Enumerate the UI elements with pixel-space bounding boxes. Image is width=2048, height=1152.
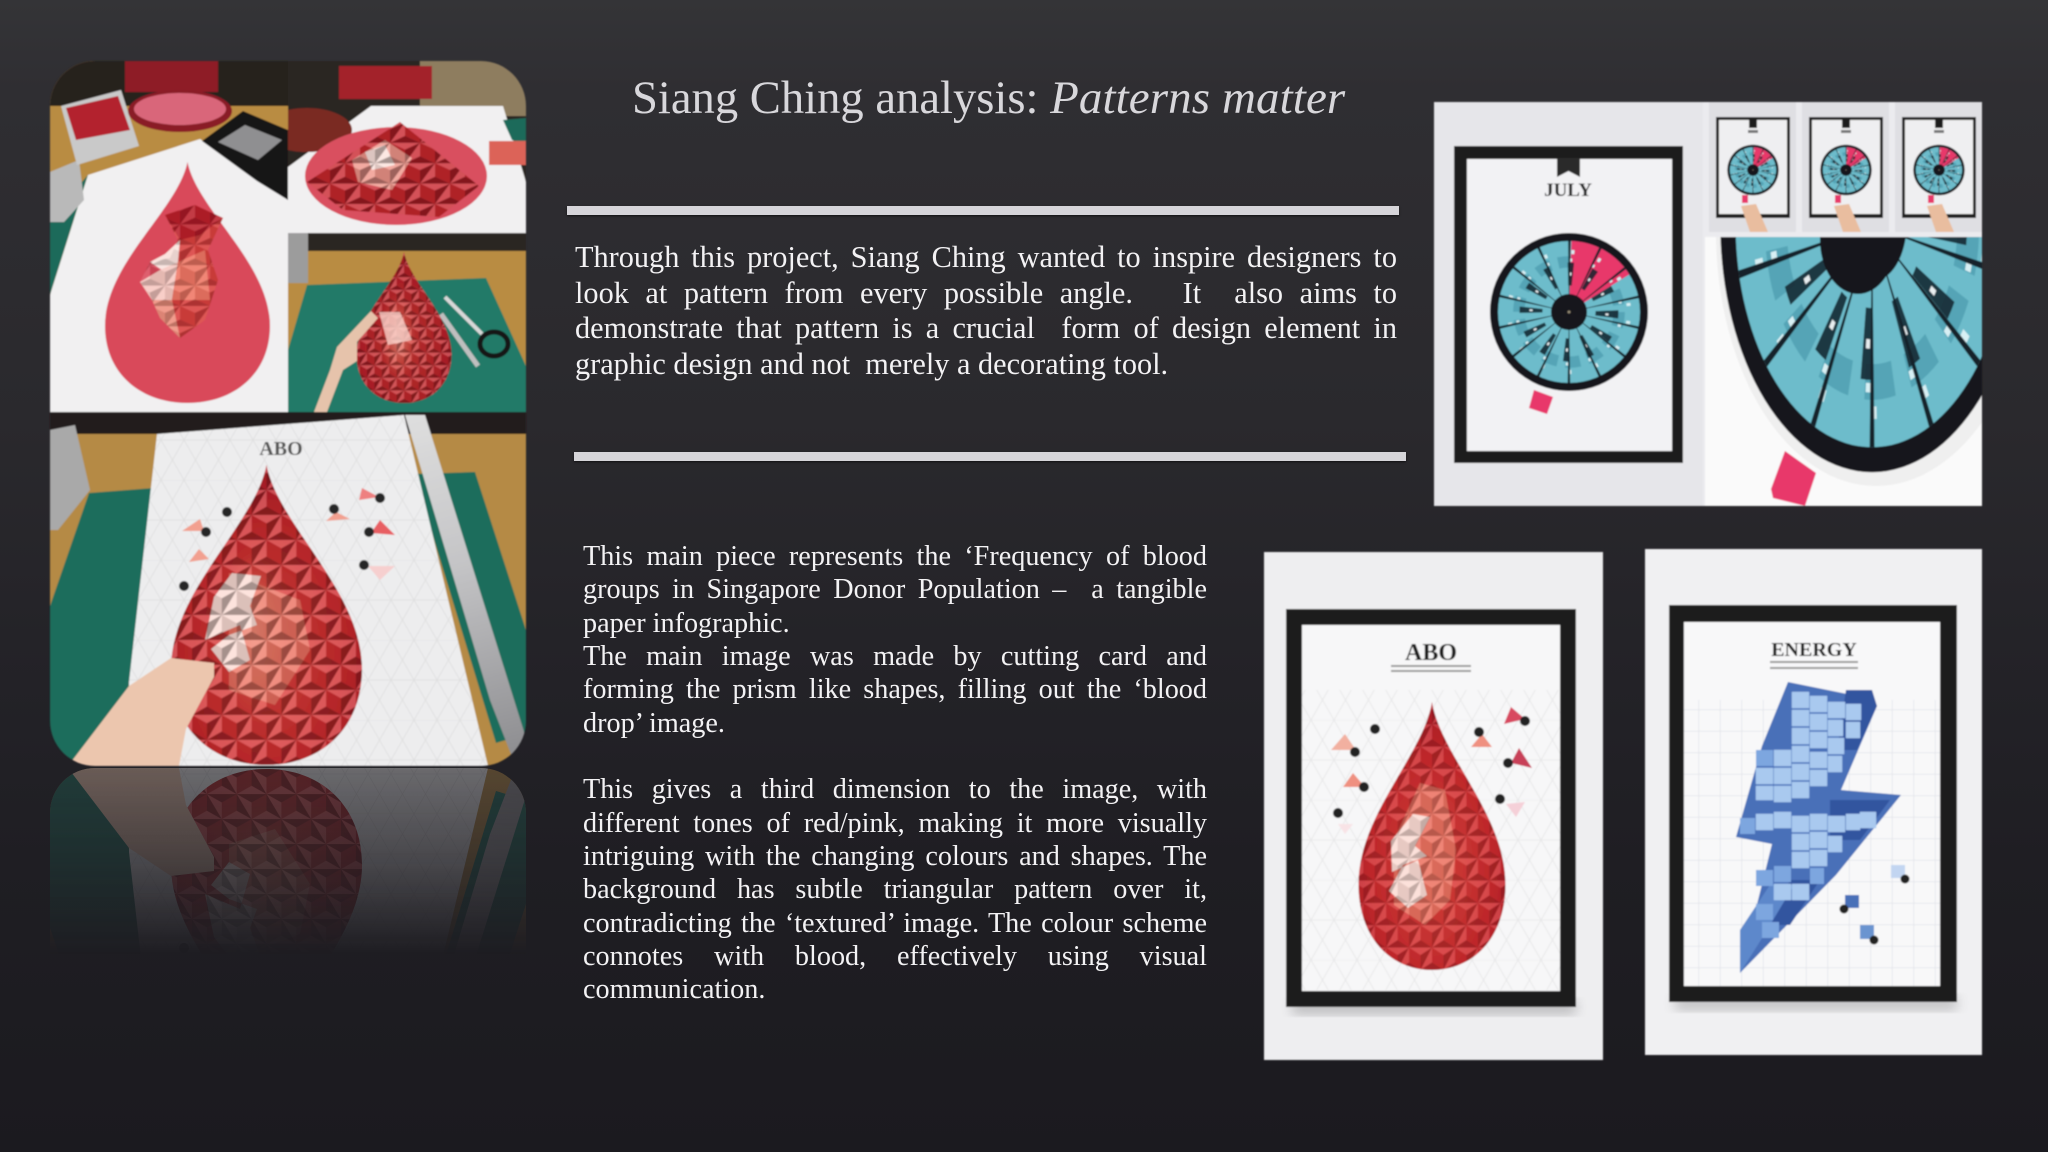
photo reflection: [50, 768, 526, 936]
poster title ABO: ABO: [1405, 640, 1457, 666]
photo: drop lying flat with folded paper: [262, 61, 526, 233]
lower divider: [574, 452, 1406, 461]
photo panel: July wheel poster series: [1433, 101, 1983, 507]
analysis paragraph: background has subtle triangular pattern over it,: [583, 874, 1207, 905]
analysis paragraph: groups in Singapore Donor Population – a tangible: [583, 574, 1207, 605]
title: Siang Ching analysis: Patterns matter: [632, 72, 1345, 124]
analysis paragraph: different tones of red/pink, making it more visually: [583, 808, 1207, 839]
close-up of wheel: [1705, 236, 1984, 507]
poster title ENERGY: ENERGY: [1771, 639, 1857, 661]
lightning bolt of paper cubes: [1736, 682, 1901, 973]
framed July poster: [1434, 102, 1703, 506]
analysis paragraph: forming the prism like shapes, filling out the ‘blood: [583, 674, 1207, 705]
analysis paragraph: This gives a third dimension to the image, with: [583, 774, 1207, 805]
photo collage: making the blood drop: [50, 60, 526, 766]
analysis paragraph: [583, 541, 1207, 1005]
blood drop of paper prisms: [1358, 702, 1506, 970]
photo: hand holding finished drop beside scissors: [288, 233, 526, 412]
intro paragraph: look at pattern from every possible angle. It also aims to: [575, 276, 1397, 310]
photo panel: framed ABO poster: [1264, 552, 1603, 1060]
analysis paragraph: This main piece represents the ‘Frequency of blood: [583, 541, 1207, 572]
photo: first facets on the printed drop: [50, 60, 288, 412]
three small July posters with hand: [1709, 102, 1982, 232]
intro paragraph: [575, 240, 1397, 381]
photo panel: framed ENERGY poster: [1645, 549, 1982, 1055]
analysis paragraph: communication.: [583, 974, 765, 1005]
upper divider: [567, 206, 1399, 215]
intro paragraph: Through this project, Siang Ching wanted to inspire designers to: [575, 240, 1397, 274]
photo: folded ABO drop held over the poster: [50, 412, 526, 766]
framed July poster: JULY: [1544, 180, 1592, 201]
analysis paragraph: contradicting the ‘textured’ image. The colour scheme: [583, 908, 1207, 939]
poster title: ABO: ABO: [259, 438, 303, 460]
analysis paragraph: connotes with blood, effectively using visual: [583, 941, 1207, 972]
analysis paragraph: paper infographic.: [583, 608, 790, 639]
analysis paragraph: drop’ image.: [583, 708, 725, 739]
intro paragraph: graphic design and not merely a decorating tool.: [575, 347, 1168, 381]
analysis paragraph: The main image was made by cutting card and: [583, 641, 1207, 672]
analysis paragraph: intriguing with the changing colours and shapes. The: [583, 841, 1207, 872]
intro paragraph: demonstrate that pattern is a crucial form of design element in: [575, 311, 1397, 345]
